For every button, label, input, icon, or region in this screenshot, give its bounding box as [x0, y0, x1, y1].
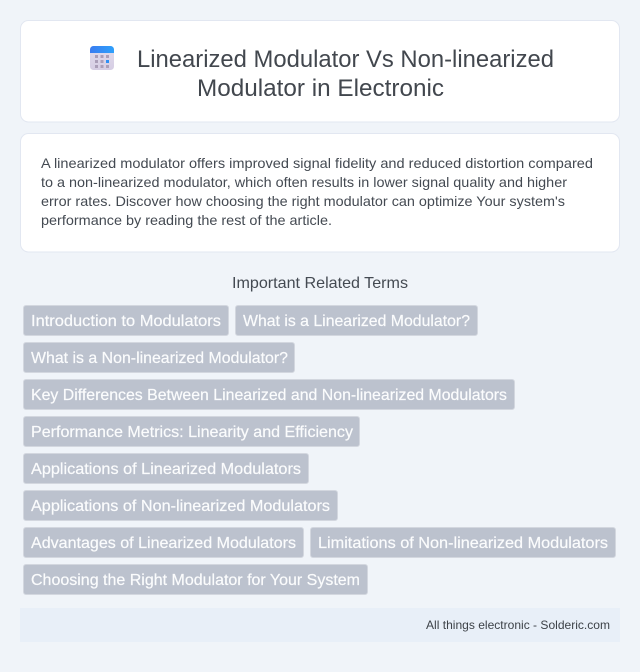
- paragraph: error rates. Discover how choosing the right modulator can optimize Your system's: [41, 193, 565, 209]
- tag: applications non-linearized: Applications of Non-linearized Modulators: [31, 498, 330, 515]
- panel: title header: [20, 20, 620, 122]
- tag: introduction: [24, 306, 228, 336]
- tag: advantages: Advantages of Linearized Modulators: [31, 535, 296, 552]
- tag: linearized definition: What is a Linearized Modulator?: [243, 313, 470, 330]
- tag: introduction: Introduction to Modulators: [31, 313, 221, 330]
- tag: choosing: Choosing the Right Modulator for Your System: [31, 572, 360, 589]
- tag: limitations: Limitations of Non-linearized Modulators: [318, 535, 608, 552]
- tag: choosing: [24, 564, 368, 594]
- tag: key differences: [24, 380, 514, 410]
- footer: [20, 608, 620, 642]
- title: Modulator in Electronic: [197, 75, 444, 102]
- icon: calendar: [90, 46, 114, 70]
- tag: performance metrics: [24, 416, 360, 446]
- tag: key differences: Key Differences Between Linearized and Non-linearized Modulators: [31, 387, 507, 404]
- tag: applications non-linearized: [24, 490, 338, 520]
- tag: applications linearized: Applications of Linearized Modulators: [31, 461, 301, 478]
- tag: linearized definition: [236, 306, 478, 336]
- tag list: [24, 306, 616, 594]
- panel: introduction text: [20, 134, 620, 252]
- footer: All things electronic - Solderic.com: [426, 618, 610, 632]
- tag: applications linearized: [24, 454, 308, 484]
- heading: important related terms: Important Related Terms: [232, 275, 408, 292]
- tag: advantages: [24, 528, 304, 558]
- tag: limitations: [310, 528, 616, 558]
- title: Linearized Modulator Vs Non-linearized: [137, 46, 554, 73]
- title: [137, 46, 554, 102]
- paragraph: A linearized modulator offers improved signal fidelity and reduced distortion compared: [41, 155, 593, 171]
- paragraph: to a non-linearized modulator, which often results in lower signal quality and higher: [41, 174, 567, 190]
- tag: non-linearized definition: [24, 342, 294, 372]
- tag: performance metrics: Performance Metrics: Linearity and Efficiency: [31, 424, 353, 441]
- paragraph: [41, 155, 593, 228]
- paragraph: performance by reading the rest of the article.: [41, 212, 332, 228]
- tag: non-linearized definition: What is a Non-linearized Modulator?: [31, 350, 288, 367]
